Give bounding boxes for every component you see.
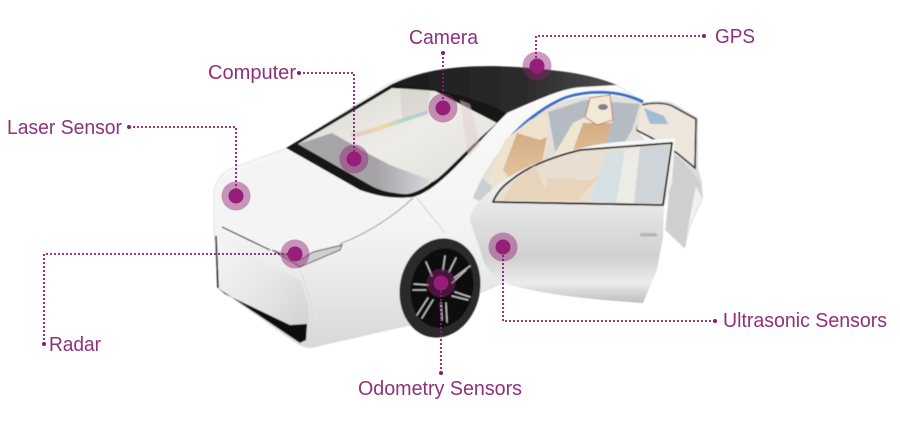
marker: Laser Sensor [127,125,250,210]
fender seams and headlight [222,198,445,347]
front wheel [390,231,490,345]
door handle [640,233,657,236]
label: Laser Sensor: Laser Sensor [7,117,122,139]
front face panel [216,236,309,343]
car interior and seats [473,92,672,205]
car illustration [214,66,703,348]
label: GPS: GPS [715,26,755,48]
marker: Camera [428,51,458,122]
front door [470,138,675,303]
rear seat [555,117,613,178]
marker: Computer [297,71,368,174]
label: Odometry Sensors: Odometry Sensors [358,378,522,400]
marker: GPS [522,34,706,80]
marker: Ultrasonic Sensors [488,232,717,323]
label: Camera: Camera [409,27,479,49]
label: Computer: Computer [208,62,296,84]
car body silhouette [214,67,650,348]
label: Radar: Radar [49,334,101,356]
door window [493,143,672,205]
front seat [488,113,548,200]
front windshield [286,84,507,198]
black roof [392,66,617,113]
marker: Radar [42,240,310,346]
rear door [635,101,703,249]
hood shading [218,155,413,262]
marker: Odometry Sensors [426,268,456,375]
label: Ultrasonic Sensors: Ultrasonic Sensors [723,310,887,332]
